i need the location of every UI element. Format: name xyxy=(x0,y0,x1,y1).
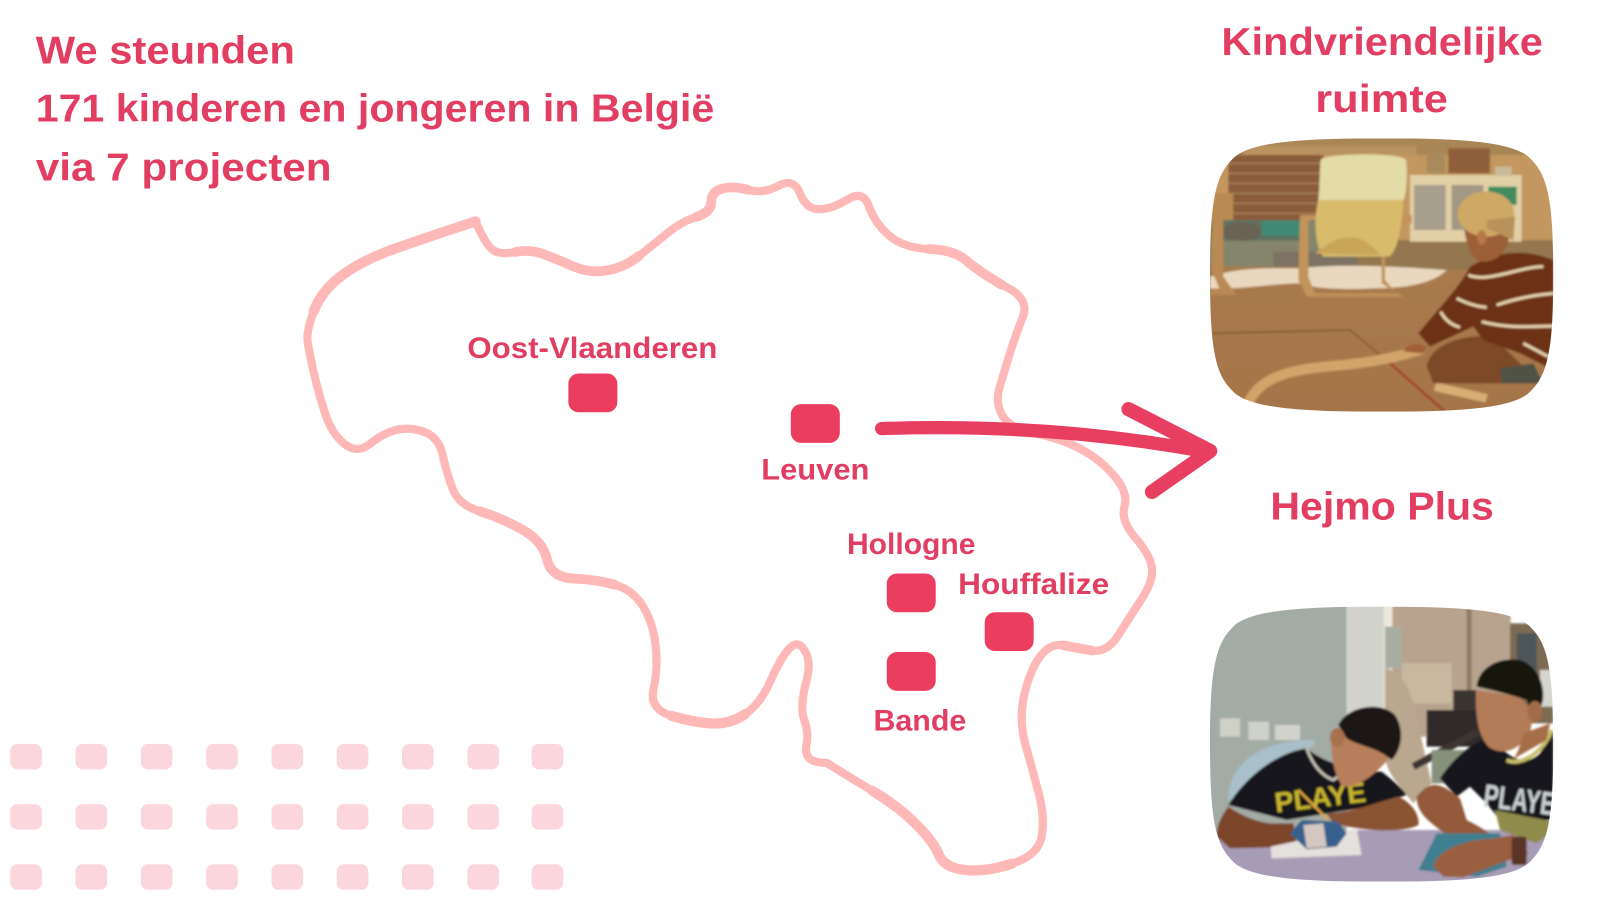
title: We steunden xyxy=(36,29,295,72)
pattern: decorative square dots xyxy=(10,744,563,890)
photo: two boys writing at a table: PLAYE xyxy=(1273,777,1368,820)
marker: Oost-Vlaanderen xyxy=(467,332,717,412)
marker: Oost-Vlaanderen: Oost-Vlaanderen xyxy=(467,332,717,365)
marker: Leuven: Leuven xyxy=(761,454,869,487)
heading: Kindvriendelijke ruimte: Kindvriendelijke xyxy=(1221,21,1543,64)
heading: Kindvriendelijke ruimte xyxy=(1221,21,1543,121)
photo: two boys writing at a table: PLAYE xyxy=(1482,777,1557,822)
photo: two boys writing at a table xyxy=(1207,603,1557,883)
marker: Houffalize: Houffalize xyxy=(958,568,1109,601)
heading: Hejmo Plus: Hejmo Plus xyxy=(1270,485,1494,528)
title xyxy=(36,29,714,190)
marker: Hollogne xyxy=(847,528,976,612)
marker: Bande xyxy=(873,652,966,738)
title: via 7 projecten xyxy=(36,147,332,190)
heading: Kindvriendelijke ruimte: ruimte xyxy=(1315,78,1448,121)
marker: Hollogne: Hollogne xyxy=(847,528,976,561)
map: outline of Belgium xyxy=(307,183,1152,870)
marker: Leuven xyxy=(761,404,869,487)
title: 171 kinderen en jongeren in België xyxy=(36,87,714,130)
arrow: from Leuven to the photos xyxy=(882,409,1210,492)
photo: child playing with wooden train track xyxy=(1207,133,1557,417)
marker: Houffalize xyxy=(958,568,1109,651)
marker: Bande: Bande xyxy=(873,705,966,738)
